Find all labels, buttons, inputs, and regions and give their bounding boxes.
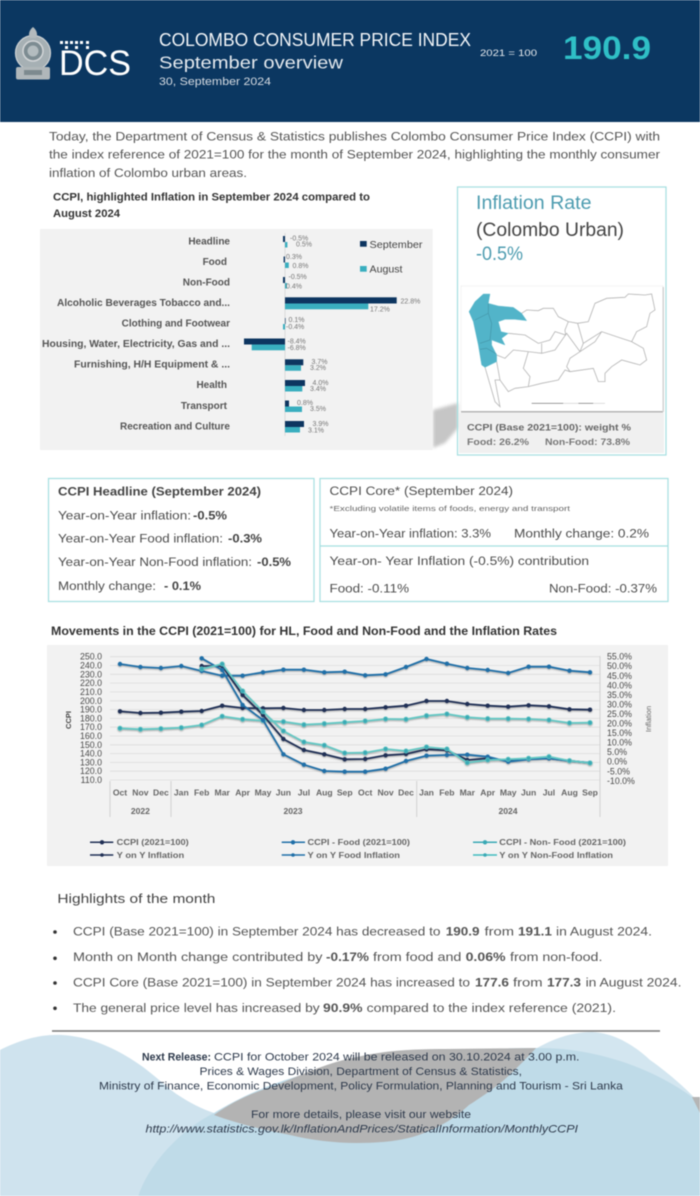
- data values: 0.8%: [297, 400, 313, 407]
- month labels: Sep: [337, 788, 353, 798]
- right axis: 30.0%: [607, 699, 632, 709]
- website prompt: For more details, please visit our website: [251, 1109, 471, 1121]
- left axis: [80, 652, 102, 785]
- month labels: Oct: [358, 788, 372, 798]
- data values: -0.5%: [288, 274, 307, 281]
- month labels: Aug: [561, 788, 578, 798]
- legend: Y on Y Inflation: [117, 850, 184, 860]
- bullet: core: in August 2024.: [586, 976, 682, 990]
- month labels: May: [500, 788, 517, 798]
- right axis: -10.0%: [607, 776, 635, 786]
- bar chart: inflation by category: [40, 229, 433, 450]
- category labels: Health: [196, 380, 227, 391]
- bullet: month on month: [53, 950, 602, 964]
- left axis: 230.0: [80, 669, 102, 679]
- category labels: Furnishing, H/H Equipment & ...: [74, 360, 230, 371]
- left axis: 250.0: [80, 652, 102, 662]
- highlights heading: Highlights of the month: [57, 891, 215, 906]
- left axis title: CCPI: [64, 711, 73, 729]
- September bars: [244, 236, 397, 427]
- bar chart heading: [53, 192, 370, 220]
- intro paragraph: [49, 130, 660, 180]
- header banner: [0, 0, 700, 122]
- month labels: Oct: [113, 788, 127, 798]
- data values: -8.4%: [288, 338, 306, 346]
- data values: -0.4%: [286, 324, 304, 331]
- weight strip: [459, 413, 664, 453]
- footer waves: [0, 1032, 700, 1196]
- right axis: 5.0%: [607, 747, 627, 757]
- inflation rate heading: Inflation Rate: [476, 193, 592, 214]
- legend: Y on Y Non-Food Inflation: [499, 850, 613, 860]
- year labels: 2024: [498, 806, 518, 816]
- panel: CCPI headline: CCPI Headline (September 2024): [58, 485, 261, 499]
- left axis: 150.0: [80, 740, 102, 750]
- left axis: 170.0: [80, 722, 102, 732]
- right axis title: Inflation: [644, 706, 653, 732]
- weight strip: Food: 26.2%: [467, 437, 530, 448]
- bullet: price level: compared to the index reference (2021).: [367, 1001, 616, 1015]
- left axis: 130.0: [80, 757, 102, 767]
- map of Colombo urban area: [461, 286, 664, 413]
- index base: 2021 = 100: [480, 48, 537, 59]
- month labels: Sep: [582, 788, 598, 798]
- bullet: CCPI: from: [484, 925, 514, 939]
- category labels: Housing, Water, Electricity, Gas and ...: [42, 339, 230, 350]
- data values: 0.1%: [288, 317, 304, 324]
- month labels: Apr: [480, 788, 496, 798]
- panel: CCPI core: CCPI Core* (September 2024): [330, 484, 513, 498]
- bar chart heading: August 2024: [53, 208, 121, 220]
- month labels: Nov: [132, 788, 149, 798]
- weight strip: Non-Food: 73.8%: [545, 437, 630, 448]
- line chart heading: Movements in the CCPI (2021=100) for HL, Food and Non-Food and the Inflation Rates: [51, 624, 557, 638]
- line chart: CCPI and inflation movements: [47, 645, 668, 866]
- legend: CCPI - Non- Food (2021=100): [499, 837, 626, 847]
- category labels: [42, 236, 230, 432]
- left axis: 120.0: [80, 766, 102, 776]
- right axis: 35.0%: [607, 690, 632, 700]
- bullet: price level: 90.9%: [323, 1001, 362, 1015]
- icon: national emblem: [16, 27, 50, 80]
- category labels: Alcoholic Beverages Tobacco and...: [57, 298, 230, 309]
- inflation value: -0.5%: [476, 244, 523, 265]
- intro paragraph: Today, the Department of Census & Statistics publishes Colombo Consumer Price Index (CCPI) with: [49, 130, 660, 144]
- legend: Y on Y Food Inflation: [308, 850, 400, 860]
- panel: CCPI headline: Year-on-Year inflation:: [58, 508, 191, 522]
- left axis: 190.0: [80, 705, 102, 715]
- series: CCPI food: [120, 659, 590, 676]
- ministry: Ministry of Finance, Economic Development, Policy Formulation, Planning and Tourism - Sri Lanka: [99, 1080, 624, 1092]
- panel: CCPI headline: - 0.1%: [164, 579, 201, 593]
- panel: CCPI headline: [48, 478, 314, 602]
- date: 30, September 2024: [159, 76, 271, 88]
- series: CCPI all items: [120, 701, 590, 713]
- bullet: CCPI: CCPI (Base 2021=100) in September 2024 has decreased to: [73, 925, 441, 939]
- bullet: price level: The general price level has increased by: [73, 1001, 320, 1015]
- bullet: CCPI: [53, 925, 652, 939]
- legend: CCPI (2021=100): [117, 837, 189, 847]
- bullet: month on month: from non-food.: [510, 950, 602, 964]
- data values: 17.2%: [370, 306, 390, 314]
- bullet: CCPI: in August 2024.: [556, 925, 652, 939]
- highlights list: [53, 925, 681, 1015]
- left axis: 110.0: [81, 775, 102, 785]
- month labels: Apr: [235, 788, 251, 798]
- left axis: 140.0: [80, 749, 102, 759]
- logo: DCS: DCS: [59, 44, 131, 83]
- data values: 3.9%: [312, 421, 328, 428]
- left axis: 210.0: [80, 687, 102, 697]
- data values: 3.4%: [310, 386, 326, 393]
- category labels: Transport: [181, 401, 228, 412]
- panel: CCPI core: Monthly change: 0.2%: [514, 527, 649, 541]
- month labels: Dec: [398, 788, 414, 798]
- bullet: CCPI: 191.1: [518, 925, 552, 939]
- bar chart heading: CCPI, highlighted Inflation in September 2024 compared to: [53, 192, 370, 204]
- footer text: [99, 1052, 624, 1136]
- month labels: May: [255, 788, 272, 798]
- month labels: [113, 788, 598, 798]
- series: year-on-year food inflation: [202, 658, 590, 772]
- data values: 0.8%: [292, 263, 308, 270]
- bullet: CCPI: 190.9: [446, 925, 480, 939]
- legend: [360, 239, 423, 275]
- series: year-on-year inflation: [202, 666, 590, 763]
- right axis: 45.0%: [607, 671, 632, 681]
- panel: CCPI headline: -0.5%: [257, 555, 291, 569]
- month labels: Jul: [543, 788, 555, 798]
- series: year-on-year non-food inflation: [202, 664, 590, 763]
- panel: CCPI headline: Year-on-Year Food inflation:: [58, 532, 223, 546]
- August bars: [252, 242, 368, 432]
- data values: 3.5%: [310, 406, 326, 413]
- bullet: core: [53, 976, 681, 990]
- intro paragraph: the index reference of 2021=100 for the month of September 2024, highlighting the monthly consumer: [49, 148, 660, 162]
- bullet: core: from: [513, 976, 543, 990]
- bullet: month on month: Month on Month change contributed by: [73, 950, 323, 964]
- panel: inflation rate: [458, 187, 666, 455]
- panel: CCPI core: Non-Food: -0.37%: [549, 582, 657, 596]
- year labels: 2022: [131, 806, 150, 816]
- bullet: core: 177.6: [475, 976, 509, 990]
- right axis: 10.0%: [607, 738, 632, 748]
- right axis: [607, 652, 635, 786]
- data values: 4.0%: [312, 380, 328, 387]
- left axis: 180.0: [80, 713, 102, 723]
- right axis: 20.0%: [607, 718, 632, 728]
- left axis: 160.0: [80, 731, 102, 741]
- next release: CCPI for October 2024 will be released on 30.10.2024 at 3.00 p.m.: [214, 1052, 580, 1064]
- month labels: Jun: [521, 788, 536, 798]
- month labels: Jan: [419, 788, 434, 798]
- intro paragraph: inflation of Colombo urban areas.: [49, 166, 247, 180]
- subtitle: September overview: [159, 52, 343, 72]
- month labels: Aug: [316, 788, 333, 798]
- month labels: Mar: [215, 788, 230, 798]
- right axis: -5.0%: [607, 766, 630, 776]
- data values: 0.4%: [286, 284, 302, 290]
- data values: -6.8%: [288, 345, 306, 352]
- year labels: [131, 806, 518, 816]
- panel: CCPI headline: -0.5%: [193, 508, 227, 522]
- data values: 0.5%: [296, 242, 312, 248]
- data values: 3.1%: [308, 428, 324, 434]
- month labels: Jul: [298, 788, 310, 798]
- bullet: core: 177.3: [547, 976, 581, 990]
- data values: 3.2%: [310, 365, 326, 372]
- panel: CCPI headline: Year-on-Year Non-Food inflation:: [58, 555, 252, 569]
- legend: August: [370, 263, 403, 275]
- panel: CCPI core: Year-on-Year inflation: 3.3%: [330, 527, 491, 541]
- data lines: [120, 658, 590, 772]
- panel: CCPI core: [320, 478, 668, 602]
- legend: September: [370, 239, 423, 251]
- right axis: 55.0%: [607, 652, 632, 662]
- panel: CCPI core: Year-on- Year Inflation (-0.5%) contribution: [330, 554, 589, 568]
- year labels: 2023: [283, 806, 303, 816]
- data values: 3.7%: [312, 359, 327, 366]
- month labels: Jan: [174, 788, 189, 798]
- category labels: Headline: [188, 236, 230, 248]
- bullet: month on month: from food and: [373, 950, 462, 964]
- month labels: Feb: [194, 788, 209, 798]
- panel: CCPI core: *Excluding volatile items of foods, energy and transport: [330, 504, 570, 513]
- next release: Next Release:: [142, 1052, 211, 1064]
- legend: CCPI - Food (2021=100): [308, 837, 410, 847]
- category labels: Clothing and Footwear: [122, 319, 230, 330]
- left axis: 240.0: [80, 660, 102, 670]
- right axis: 25.0%: [607, 709, 632, 719]
- month labels: Nov: [377, 788, 394, 798]
- legend: [90, 837, 626, 860]
- month labels: Feb: [439, 788, 455, 798]
- title: COLOMBO CONSUMER PRICE INDEX: [159, 30, 471, 50]
- month labels: Jun: [276, 788, 291, 798]
- category labels: Recreation and Culture: [120, 422, 230, 432]
- panel: CCPI headline: Monthly change:: [58, 579, 156, 593]
- left axis: 220.0: [80, 678, 102, 688]
- right axis: 40.0%: [607, 680, 632, 690]
- right axis: 50.0%: [607, 661, 632, 671]
- panel: CCPI core: Food: -0.11%: [330, 582, 409, 596]
- index value: 190.9: [563, 30, 651, 66]
- right axis: 0.0%: [607, 757, 627, 767]
- month labels: Dec: [153, 788, 169, 798]
- category labels: Non-Food: [183, 278, 230, 288]
- data values: 22.8%: [400, 298, 420, 306]
- data values: -0.5%: [290, 236, 308, 242]
- right axis: 15.0%: [607, 728, 632, 738]
- data values: 0.3%: [286, 254, 302, 261]
- series: CCPI non-food: [120, 714, 590, 729]
- left axis: 200.0: [80, 696, 102, 706]
- month labels: Mar: [460, 788, 476, 798]
- division: Prices & Wages Division, Department of Census & Statistics,: [200, 1066, 522, 1078]
- bullet: core: CCPI Core (Base 2021=100) in September 2024 has increased to: [73, 976, 470, 990]
- bullet: month on month: 0.06%: [466, 950, 506, 964]
- bullet: month on month: -0.17%: [326, 950, 369, 964]
- region label: (Colombo Urban): [476, 220, 624, 241]
- weight strip: CCPI (Base 2021=100): weight %: [467, 423, 632, 434]
- bullet: price level: [53, 1001, 616, 1015]
- website address: http://www.statistics.gov.lk/InflationAndPrices/StaticalInformation/MonthlyCCPI: [146, 1124, 578, 1136]
- panel: CCPI headline: -0.3%: [228, 532, 262, 546]
- category labels: Food: [203, 257, 227, 268]
- data values: [286, 236, 420, 434]
